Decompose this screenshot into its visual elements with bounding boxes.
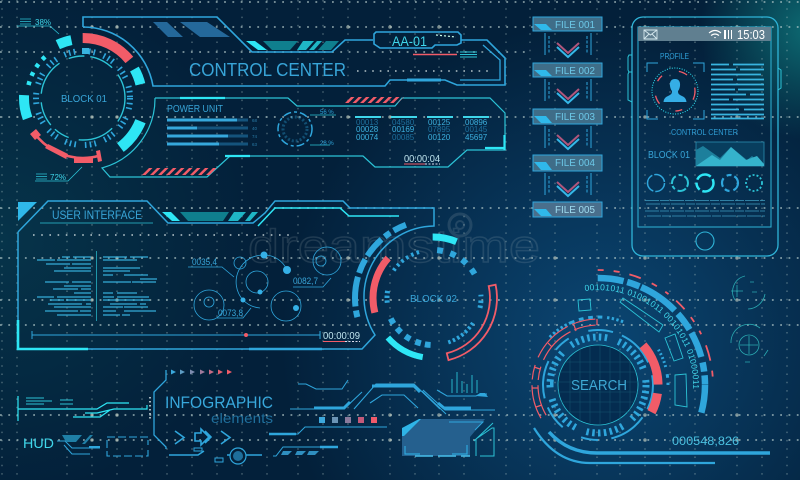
data columns: 00896: [465, 118, 488, 127]
connector 3: [545, 126, 591, 149]
bar chart: 68: [252, 118, 258, 123]
cyan lower right arc: [21, 36, 145, 160]
cyan top arc: [372, 237, 494, 359]
panel: circuit decorations: [269, 372, 495, 456]
red status line: [413, 54, 457, 56]
bar chart: 63: [252, 142, 258, 147]
data columns: 00028: [356, 125, 379, 134]
blue outer arc: [491, 278, 705, 480]
scope grid: [558, 345, 638, 425]
tick rings: [550, 337, 646, 433]
home button: [696, 232, 714, 250]
white dotted row: [33, 234, 295, 236]
bottom curves: [549, 432, 770, 453]
corner triangle: [18, 202, 37, 221]
file 001: FILE 001: [555, 20, 595, 31]
tag AA-01: AA-01: [392, 34, 427, 49]
text lines left: [37, 257, 91, 315]
phone subheading: CONTROL CENTER: [671, 128, 738, 137]
bar chart: 40: [252, 126, 258, 131]
dashed bracket: [107, 437, 148, 456]
timeline: [32, 331, 360, 342]
red left arc: [373, 238, 493, 358]
red top arc: [23, 38, 143, 158]
panel: hud: [18, 396, 148, 456]
inner corner bracket: [460, 45, 500, 80]
circle connector: [169, 448, 262, 464]
lower curve: [534, 428, 715, 463]
text lines: [26, 398, 73, 404]
thick wire segments: [314, 386, 471, 408]
panel: file list: [533, 17, 602, 217]
data columns: 00085: [392, 133, 415, 142]
wire top left: [298, 380, 348, 389]
profile heading: PROFILE: [660, 52, 689, 61]
header cyan stripes: [246, 41, 339, 50]
panel: user interface: [18, 201, 434, 349]
bar chart: 74: [252, 134, 258, 139]
readout: 000548,826: [672, 434, 739, 448]
dotted arc: [530, 317, 666, 453]
heading underline: [40, 222, 153, 224]
callout 38%: [17, 18, 59, 34]
red solid arcs: [538, 325, 658, 445]
header stripes: [162, 212, 258, 221]
blue outer segments: [355, 220, 511, 376]
red dashed arc: [483, 270, 713, 480]
file 004: [533, 155, 602, 171]
inner thin ring: [41, 56, 125, 140]
panel: phone: [628, 17, 781, 256]
bar chart: [167, 118, 258, 147]
inner tick ring: [36, 51, 130, 145]
watermark: dreamstime: [248, 220, 540, 272]
data columns: 45697: [465, 133, 488, 142]
frame inner cyan: [258, 208, 399, 226]
tinted panel: [402, 419, 485, 456]
ring icons: [648, 174, 762, 192]
dotted right arc: [528, 315, 668, 455]
area chart: [696, 142, 764, 166]
data columns: 07895: [428, 125, 451, 134]
node values: 0073,8: [218, 308, 243, 318]
panel: block 01 dial: [17, 18, 145, 182]
bracket: [154, 370, 166, 449]
side buttons: [628, 55, 781, 102]
file 004: FILE 004: [555, 158, 595, 169]
dial marker: [82, 48, 89, 54]
thick frame accents: [18, 320, 88, 349]
status squares: [319, 417, 377, 423]
binary text: 00101011 01001011 00101011 01000011: [584, 284, 699, 389]
red lower arc: [23, 38, 143, 158]
file 002: [533, 63, 602, 77]
frame outline: [102, 98, 505, 177]
data columns: 00120: [428, 133, 451, 142]
node diagram: [188, 247, 341, 321]
mini bar chart: [437, 372, 488, 397]
phone fine print: [645, 200, 765, 216]
phone body: [632, 17, 778, 256]
gauge: 56 %: [320, 110, 334, 116]
white dotted row: [357, 70, 490, 72]
data columns: 00125: [428, 118, 451, 127]
timer: 00:00:04: [404, 154, 440, 165]
frame outer: [18, 201, 434, 349]
subtitle: elements: [211, 410, 273, 426]
panel: power unit: [102, 98, 505, 177]
data columns: 04580: [392, 118, 415, 127]
frame outline: [83, 17, 505, 86]
side outlines: [474, 423, 494, 456]
icon: crosshair bottom: [731, 324, 768, 362]
panel: block 02 dial: [355, 220, 511, 376]
chevrons: [175, 429, 230, 445]
accent strokes: [180, 98, 504, 156]
callout 72%: 72%: [50, 173, 66, 182]
red outlined segments: [532, 319, 664, 451]
timeline: 00:00:09: [323, 331, 360, 342]
node values: 0035,4: [192, 257, 217, 267]
node values: 0082,7: [293, 276, 318, 286]
cyan dots: [27, 42, 139, 154]
gauge: [278, 110, 336, 147]
phone block label: BLOCK 01: [648, 150, 690, 161]
title: INFOGRAPHIC: [165, 393, 273, 412]
lower wire: [270, 427, 387, 434]
file 003: [533, 109, 602, 124]
main wires: [290, 384, 495, 414]
file 001: [533, 17, 602, 31]
status bar: [638, 27, 771, 42]
thick bottom segment: [407, 78, 441, 82]
file 005: [533, 202, 602, 217]
hud decoration: [57, 435, 100, 454]
red lower blocks: [30, 129, 102, 163]
inner dashes: [385, 250, 481, 346]
divider: [96, 251, 98, 321]
data columns: 00145: [465, 125, 488, 134]
data columns: 00074: [356, 133, 379, 142]
profile brackets: [647, 63, 704, 119]
callout 72%: [35, 167, 82, 182]
cyan arc segments: [24, 39, 142, 157]
avatar: [652, 68, 698, 114]
triangles: [171, 370, 232, 374]
profile text lines: [711, 64, 764, 118]
heading: USER INTERFACE: [52, 208, 142, 222]
file 005: FILE 005: [555, 205, 595, 216]
stripes wire: [273, 447, 338, 456]
connector 4: [545, 173, 591, 196]
panel: control center frame: [83, 17, 505, 86]
red outlined arc: [447, 285, 497, 360]
dial label: BLOCK 02: [410, 293, 457, 305]
screen: [638, 27, 771, 227]
panel: infographic heading: [150, 370, 273, 464]
icon: crosshair top: [731, 276, 765, 309]
red stripes upper: [348, 97, 401, 103]
file 003: FILE 003: [555, 112, 595, 123]
cyan bottom arc: [373, 238, 493, 358]
dial label: BLOCK 01: [61, 93, 107, 105]
mid ring: [543, 330, 653, 440]
small text lines: [460, 52, 477, 57]
data columns: 00013: [356, 118, 379, 127]
node values: [192, 257, 318, 318]
panel: search dial: [531, 269, 770, 464]
dot column: [149, 397, 151, 421]
callout 38%: 38%: [35, 18, 51, 27]
text lines right: [103, 257, 157, 315]
header stripes: [153, 22, 230, 37]
title: CONTROL CENTER: [189, 59, 346, 80]
search label: SEARCH: [571, 377, 627, 394]
data columns: [355, 117, 489, 142]
hud label: HUD: [23, 435, 54, 451]
hud lines: [18, 396, 147, 421]
file 002: FILE 002: [555, 66, 595, 77]
heading: POWER UNIT: [167, 104, 223, 115]
red stripes lower: [146, 168, 214, 175]
status bar: 15:03: [737, 28, 765, 42]
gauge: 28 %: [320, 141, 334, 147]
connector 2: [545, 79, 591, 103]
thick lower wire: [269, 433, 296, 435]
data columns: 00169: [392, 125, 415, 134]
tag AA-01: [374, 32, 461, 49]
connector 1: [545, 33, 591, 57]
teal outlined boxes: [578, 298, 687, 407]
